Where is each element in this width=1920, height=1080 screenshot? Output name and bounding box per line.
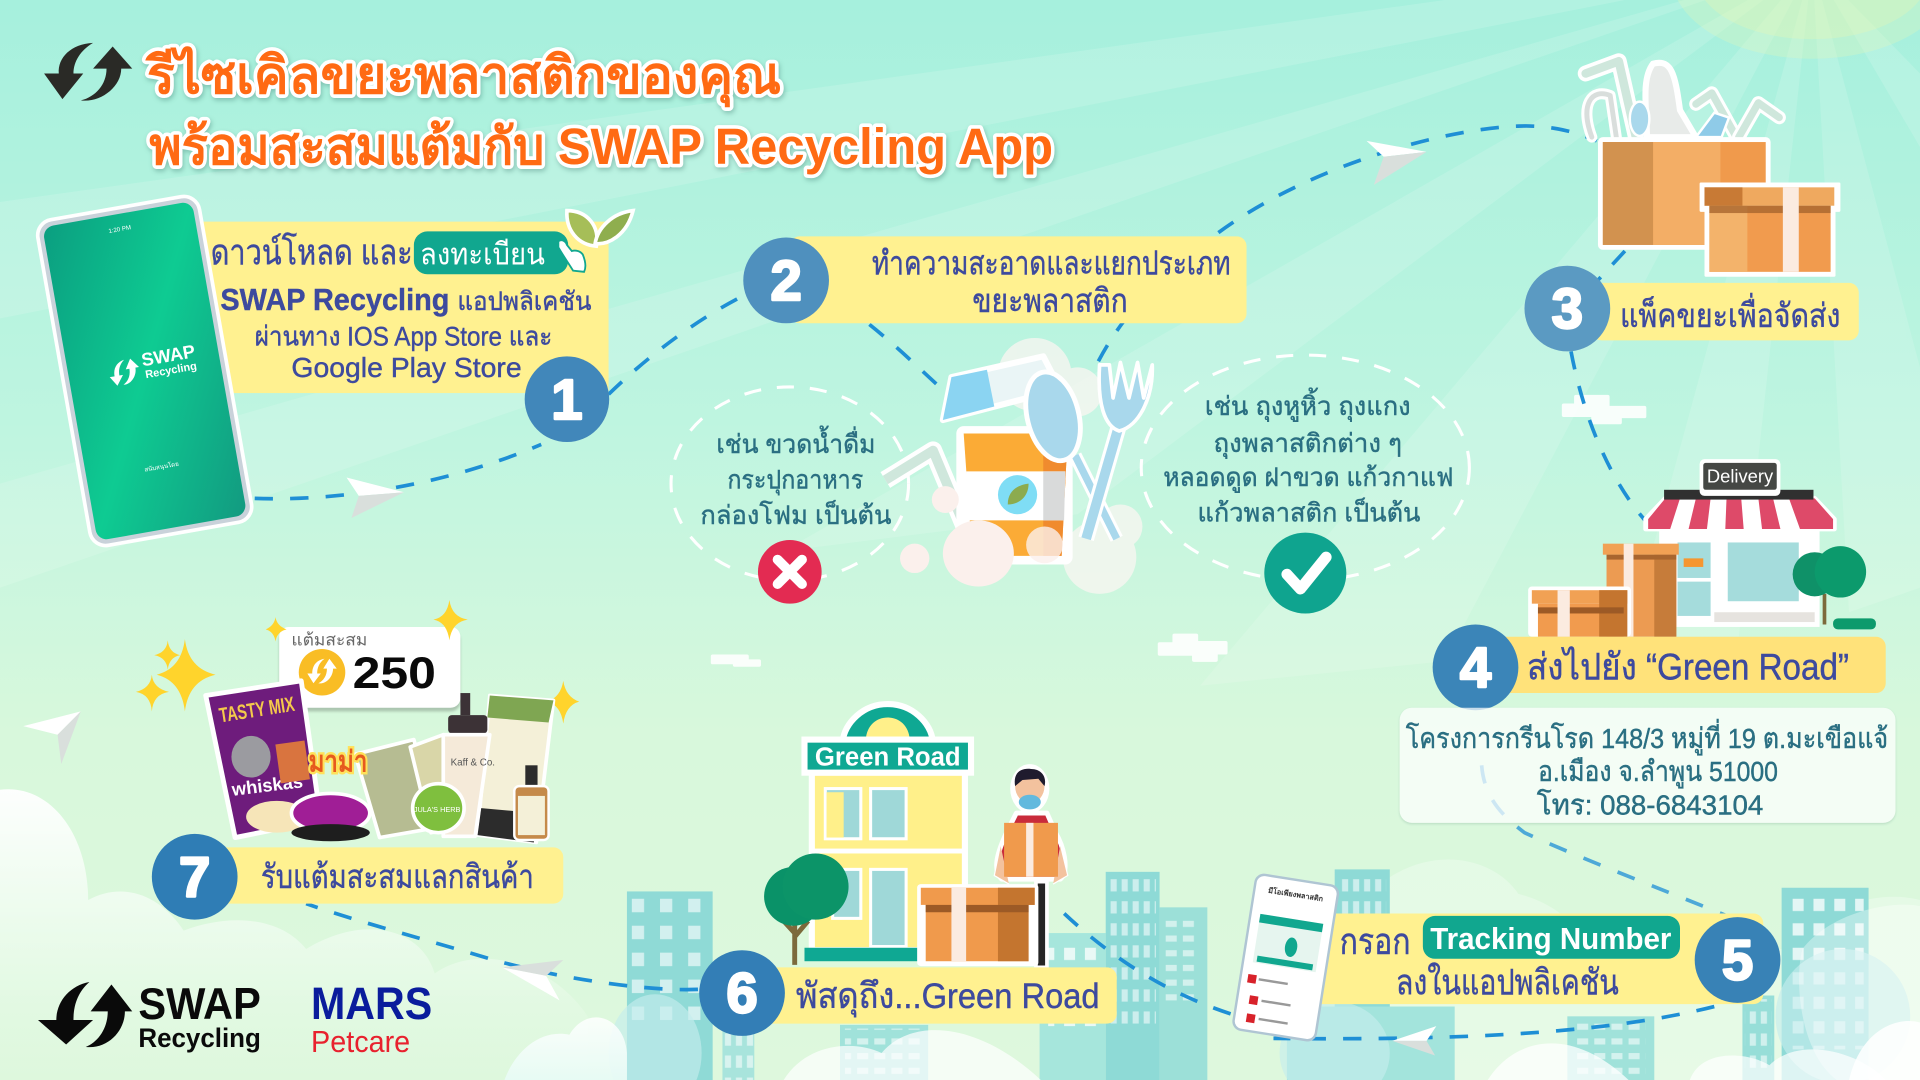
step 3 text: แพ็คขยะเพื่อจัดส่ง — [1620, 293, 1840, 335]
step 6 badge: 6 — [726, 962, 758, 1025]
paper plane 7 — [23, 711, 81, 764]
whiskas pouch — [206, 681, 321, 838]
parcel — [917, 884, 1038, 966]
building body — [812, 773, 965, 950]
phone: app splash — [35, 194, 254, 548]
line: หลอดดูด ฝาขวด แก้วกาแฟ — [1163, 464, 1453, 493]
dashed route — [255, 126, 1739, 1039]
footer logo: Mars Petcare — [311, 978, 432, 1059]
shampoo bottle: Kaff & Co. — [451, 757, 495, 768]
phone number: โทร: 088-6843104 — [1537, 788, 1763, 820]
points value: 250 — [353, 649, 436, 698]
text: SWAP Recycling app: SWAP Recycling แอปพลิเคชัน — [220, 283, 591, 317]
step 7 badge: 7 — [179, 845, 210, 908]
text: fill in: กรอก — [1340, 921, 1411, 962]
step 2 badge: 2 — [770, 249, 802, 312]
line: เช่น ถุงหูหิ้ว ถุงแกง — [1205, 388, 1411, 422]
address line 2: อ.เมือง จ.ลำพูน 51000 — [1538, 756, 1778, 789]
bowl and brand marks — [291, 745, 464, 841]
delivery sign: Delivery — [1707, 465, 1774, 486]
plastics in box — [1586, 61, 1779, 137]
foreground clouds — [504, 1017, 627, 1080]
sun glow — [1671, 0, 1920, 59]
register button: ลงทะเบียน — [420, 237, 545, 271]
building 11 — [1782, 888, 1869, 1080]
step 4 badge — [1433, 624, 1518, 710]
sun rays — [0, 0, 1920, 686]
line: กล่องโฟม เป็นต้น — [700, 499, 891, 530]
step 5 badge — [1695, 917, 1780, 1003]
app icon — [107, 357, 142, 387]
rewards illustration — [136, 600, 579, 842]
awning — [1646, 498, 1834, 529]
step 2 badge — [743, 238, 829, 323]
step 1 badge — [525, 356, 609, 442]
address card — [1400, 708, 1896, 823]
small box — [1701, 184, 1839, 276]
windows — [825, 789, 906, 947]
left cloud bank — [0, 789, 588, 1080]
spoon — [1017, 366, 1117, 539]
dashed bubble — [671, 387, 909, 580]
step 6 panel — [699, 950, 1117, 1036]
icon: hand cursor — [558, 240, 585, 272]
step 3 badge: 3 — [1552, 277, 1583, 340]
footer logo: SWAP Recycling — [38, 980, 261, 1053]
title line 1: รีไซเคิลขยะพลาสติกของคุณ — [145, 45, 781, 108]
paper plane 5 — [1392, 1026, 1436, 1056]
plastic waste to reject bubble — [671, 387, 909, 604]
pink balls — [900, 486, 1063, 587]
step 3 badge — [1524, 266, 1610, 351]
shampoo bottle — [443, 693, 495, 836]
building 7 — [1335, 869, 1390, 1080]
line: เช่น ขวดน้ำดื่ม — [716, 426, 876, 459]
big box — [1598, 137, 1771, 250]
fork — [1086, 362, 1152, 539]
courier — [994, 764, 1068, 967]
small box — [1528, 587, 1631, 637]
points card — [279, 627, 460, 708]
icon: leaves — [567, 211, 633, 246]
title — [145, 45, 1053, 175]
foam puffs — [998, 338, 1142, 594]
building 9 — [1567, 1016, 1654, 1080]
small clouds — [713, 397, 1644, 665]
serum bottle — [514, 765, 549, 840]
step 1: yellow panel — [184, 211, 633, 393]
text: Google Play: Google Play Store — [291, 352, 522, 383]
status bar: 1:20 PM — [108, 224, 132, 235]
clouds and city skyline — [0, 789, 1920, 1080]
line: ถุงพลาสติกต่าง ๆ — [1213, 430, 1402, 459]
step 2 line 1: ทำความสะอาดและแยกประเภท — [872, 245, 1231, 282]
petcare: Petcare — [311, 1025, 410, 1059]
paper plane 6 — [502, 960, 563, 1000]
step 5 badge: 5 — [1722, 929, 1753, 992]
step 7 badge — [152, 834, 238, 920]
title line 2: พร้อมสะสมแต้มกับ SWAP Recycling App — [149, 117, 1053, 175]
paper plane 1 — [347, 478, 404, 518]
step 2 panel — [743, 236, 1247, 323]
dashed bubble — [1141, 355, 1469, 580]
illustration: plastic cup and cutlery — [885, 338, 1152, 594]
coin — [299, 649, 345, 696]
illustration: delivery shop — [1528, 459, 1876, 637]
pale mist clouds — [609, 949, 1910, 1080]
illustration: packed boxes with plastic — [1586, 61, 1839, 276]
bowl and brand marks: มาม่า — [309, 745, 367, 778]
line: กระปุกอาหาร — [727, 467, 863, 496]
step 6 text: พัสดุถึง...Green Road — [796, 976, 1100, 1017]
step 6 badge — [699, 950, 785, 1036]
tube conditioner — [478, 696, 553, 842]
bowl and brand marks: JULA'S HERB — [414, 805, 461, 814]
building 10 — [1742, 996, 1774, 1080]
building 5 — [1106, 872, 1160, 1080]
phone: tracking screen — [1232, 874, 1339, 1041]
tall box — [1603, 544, 1679, 637]
paper plane 2 — [1367, 141, 1427, 185]
lid — [943, 356, 1060, 420]
shop body — [1659, 527, 1820, 627]
cup — [956, 426, 1073, 564]
base strip — [804, 948, 922, 961]
line: แก้วพลาสติก เป็นต้น — [1198, 497, 1420, 528]
points label: แต้มสะสม — [291, 629, 367, 649]
step 3 panel — [1524, 266, 1859, 351]
step 4 panel — [1433, 624, 1886, 710]
illustration: Green Road building and courier — [764, 704, 1068, 967]
olive sachets — [355, 735, 463, 838]
arch — [842, 704, 933, 742]
text: into the app: ลงในแอปพลิเคชัน — [1396, 962, 1619, 1002]
wordmark: SWAP — [138, 980, 261, 1029]
delivery sign — [1700, 459, 1780, 496]
step 5 panel — [1310, 913, 1780, 1004]
phone: tracking screen: มีโอเพียงพลาสติก — [1267, 885, 1324, 903]
tracking number pill: Tracking Number — [1430, 922, 1672, 956]
sponsor marks: สนับสนุนโดย — [144, 460, 180, 474]
step 1 badge: 1 — [551, 368, 583, 431]
tree — [764, 853, 849, 965]
step 4 text: ส่งไปยัง “Green Road” — [1527, 647, 1849, 688]
panel background — [184, 222, 609, 393]
whiskas pouch: whiskas — [230, 770, 304, 800]
tree — [1793, 546, 1876, 629]
black fascia — [1664, 490, 1813, 500]
building 6 — [1160, 907, 1207, 1080]
building 4 — [1040, 933, 1106, 1080]
building 3 — [840, 1025, 928, 1080]
text: stores: ผ่านทาง IOS App Store และ — [255, 321, 552, 351]
title logo icon — [44, 43, 132, 101]
whiskas pouch: TASTY MIX — [218, 693, 296, 727]
icon: cross — [758, 540, 822, 604]
building 2 — [722, 1030, 754, 1080]
right cloud bank — [1347, 859, 1920, 1080]
step 7 panel — [152, 834, 563, 920]
sign: Green Road — [815, 743, 961, 771]
stars — [136, 600, 579, 724]
icon: check — [1264, 533, 1346, 613]
step 2 line 2: ขยะพลาสติก — [972, 283, 1128, 320]
icon: swap arrows — [38, 982, 132, 1047]
step 7 text: รับแต้มสะสมแลกสินค้า — [261, 859, 534, 896]
straw — [885, 451, 967, 533]
wordmark sub: Recycling — [138, 1023, 261, 1053]
building 8 — [1287, 1007, 1455, 1080]
building 1 — [627, 891, 713, 1080]
app name: SWAP — [140, 340, 197, 370]
plastic waste accept bubble — [1141, 355, 1469, 613]
mars: MARS — [311, 978, 432, 1029]
app subtitle: Recycling — [144, 360, 198, 381]
step 4 badge: 4 — [1460, 636, 1492, 699]
text: download: ดาวน์โหลด และ — [211, 232, 413, 272]
